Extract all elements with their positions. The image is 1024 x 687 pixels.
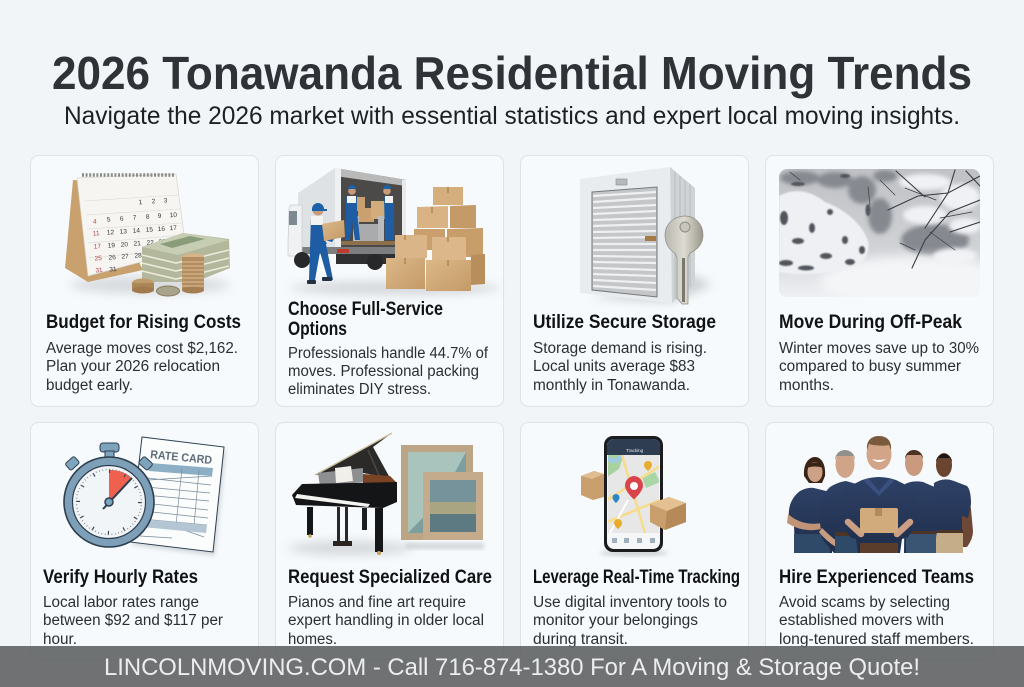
heading: Verify Hourly Rates: [43, 567, 198, 588]
body text: Average moves cost $2,162.: [46, 340, 238, 357]
icon: desk calendar with cash and coins: 9: [158, 213, 162, 220]
body text: [533, 340, 707, 394]
heading: Hire Experienced Teams: [779, 567, 974, 588]
icon: desk calendar with cash and coins: 24: [170, 238, 178, 245]
icon: desk calendar with cash and coins: 23: [158, 239, 166, 246]
body text: [533, 594, 727, 648]
icon: desk calendar with cash and coins: 10: [170, 212, 178, 219]
body text: Pianos and fine art require: [288, 594, 466, 611]
heading: Options: [288, 319, 347, 340]
panel: request specialized care: [276, 422, 504, 660]
body text: months.: [779, 377, 834, 394]
icon: desk calendar with cash and coins: 5: [107, 216, 111, 224]
body text: Storage demand is rising.: [533, 340, 707, 357]
body text: moves. Professional packing: [288, 363, 479, 380]
icon: storage unit and key: [580, 167, 712, 304]
heading: Leverage Real-Time Tracking: [533, 567, 740, 588]
sub: phone: Tracking: [626, 448, 644, 453]
body text: Use digital inventory tools to: [533, 594, 727, 611]
icon: desk calendar with cash and coins: 20: [120, 241, 129, 249]
heading: Budget for Rising Costs: [46, 312, 241, 333]
panel: verify hourly rates: [30, 422, 258, 660]
body text: between $92 and $117 per: [43, 612, 223, 629]
icon: team of five movers: [787, 436, 973, 556]
icon: stopwatch and rate card: [64, 437, 226, 556]
heading: Move During Off-Peak: [779, 312, 962, 333]
body text: Professionals handle 44.7% of: [288, 345, 489, 362]
icon: desk calendar with cash and coins: 22: [146, 239, 155, 247]
icon: phone tracking map and boxes: [581, 436, 686, 556]
body text: eliminates DIY stress.: [288, 381, 431, 398]
body text: [779, 594, 974, 648]
sub: mover 2: [819, 450, 860, 553]
sub: mover 4: [904, 450, 937, 553]
body text: [46, 340, 238, 394]
icon: desk calendar with cash and coins: [65, 174, 230, 296]
subtitle: Navigate the 2026 market with essential statistics and expert local moving insights.: [64, 102, 960, 130]
body text: compared to busy summer: [779, 358, 961, 375]
body text: Avoid scams by selecting: [779, 594, 950, 611]
panel: hire experienced teams: [766, 422, 994, 660]
body text: Local labor rates range: [43, 594, 199, 611]
icon: desk calendar with cash and coins: 19: [108, 242, 116, 250]
sub: grand piano: [292, 433, 397, 555]
body text: established movers with: [779, 612, 944, 629]
panel: utilize secure storage: [520, 156, 748, 406]
body text: [43, 594, 223, 648]
icon: desk calendar with cash and coins: 4: [93, 218, 97, 226]
icon: desk calendar with cash and coins: 13: [120, 228, 128, 236]
icon: moving truck, movers and boxes: [288, 168, 500, 295]
body text: Local units average $83: [533, 358, 695, 375]
sub: stopwatch: [64, 443, 154, 547]
body text: monitor your belongings: [533, 612, 698, 629]
icon: desk calendar with cash and coins: 3: [164, 197, 168, 205]
sub: left box: [581, 471, 604, 500]
icon: desk calendar with cash and coins: 14: [133, 227, 141, 235]
heading: Request Specialized Care: [288, 567, 492, 588]
body text: Winter moves save up to 30%: [779, 340, 979, 357]
body text: [288, 345, 489, 398]
heading: Choose Full-Service: [288, 299, 443, 320]
icon: desk calendar with cash and coins: 31: [95, 267, 103, 275]
sub: movers in truck: [345, 185, 394, 240]
icon: desk calendar with cash and coins: 16: [157, 226, 166, 233]
icon: desk calendar with cash and coins: 7: [133, 215, 137, 222]
sub: main mover: [844, 436, 914, 553]
sub: rate card: [130, 437, 226, 556]
banner: [0, 646, 1024, 687]
sub: box pile: [386, 187, 485, 291]
heading: [288, 299, 443, 340]
icon: desk calendar with cash and coins: 17: [94, 243, 102, 251]
body text: hour.: [43, 631, 77, 648]
icon: desk calendar with cash and coins: 26: [108, 254, 116, 262]
icon: desk calendar with cash and coins: 8: [146, 214, 150, 221]
panel: budget for rising costs: [30, 156, 258, 406]
icon: desk calendar with cash and coins: 6: [120, 215, 124, 223]
panel: leverage real-time tracking: [520, 422, 748, 660]
body text: during transit.: [533, 631, 628, 648]
sub: mover 5: [932, 453, 973, 556]
banner text: LINCOLNMOVING.COM - Call 716-874-1380 For A Moving & Storage Quote!: [104, 654, 920, 681]
body text: monthly in Tonawanda.: [533, 377, 690, 394]
icon: desk calendar with cash and coins: 15: [146, 226, 154, 234]
sub: right box: [650, 497, 686, 530]
icon: desk calendar with cash and coins: 21: [133, 240, 142, 248]
icon: desk calendar with cash and coins: 1: [139, 199, 143, 206]
body text: homes.: [288, 631, 337, 648]
body text: Plan your 2026 relocation: [46, 358, 220, 375]
body text: expert handling in older local: [288, 612, 484, 629]
photo: snowy winter trees: [779, 169, 980, 297]
body text: [779, 340, 979, 394]
title: 2026 Tonawanda Residential Moving Trends: [52, 47, 972, 99]
panel: move during off-peak: [766, 156, 1010, 406]
sub: key: [665, 216, 703, 304]
icon: desk calendar with cash and coins: 11: [93, 230, 100, 238]
sub: mover 1: [787, 457, 835, 553]
heading: Utilize Secure Storage: [533, 312, 716, 333]
body text: budget early.: [46, 377, 133, 394]
icon: desk calendar with cash and coins: 17: [169, 225, 178, 232]
body text: long-tenured staff members.: [779, 631, 974, 648]
body text: [288, 594, 484, 648]
sub: rate card: RATE CARD: [150, 449, 213, 467]
icon: grand piano and wrapped art: [288, 433, 484, 555]
icon: desk calendar with cash and coins: 12: [107, 229, 115, 237]
sub: framed paintings: [401, 445, 484, 549]
panel: choose full-service options: [276, 156, 504, 406]
icon: desk calendar with cash and coins: 2: [152, 198, 156, 205]
icon: desk calendar with cash and coins: 25: [94, 255, 102, 263]
icon: desk calendar with cash and coins: 31: [109, 266, 117, 274]
sub: foreground mover: [307, 203, 345, 284]
icon: desk calendar with cash and coins: 27: [121, 253, 129, 261]
icon: desk calendar with cash and coins: 28: [134, 252, 142, 260]
